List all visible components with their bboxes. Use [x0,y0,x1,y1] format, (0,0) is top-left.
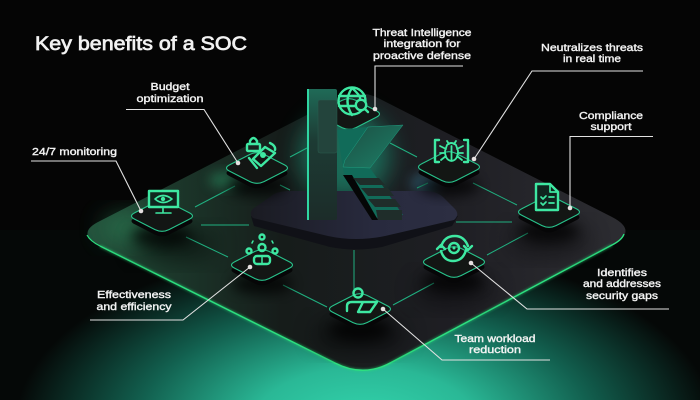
tile: neutralizes threats [418,140,480,196]
callout: team workload reduction: reduction [469,344,521,356]
callout: neutralizes threats [472,42,643,161]
callout: budget optimization: optimization [136,93,204,105]
callout: threat intelligence integration: proactive defense [373,50,471,62]
tile: compliance support [518,184,580,241]
callout: compliance support [568,110,653,210]
icon: bug in brackets [435,140,468,162]
callout: effectiveness and efficiency: and efficiency [96,301,172,313]
icon: person with laptop [347,288,377,312]
callout: threat intelligence integration [372,27,472,111]
callout: identifies security gaps: and addresses [583,278,661,290]
callout: team workload reduction: Team workload [454,333,536,345]
callout: identifies security gaps [469,261,669,309]
tile: effectiveness and efficiency [232,234,292,294]
icon: document with checklist [536,184,558,210]
icon: monitor with eye [149,191,178,213]
connector lines [186,143,528,307]
callout: threat intelligence integration: Threat Intelligence [372,27,472,39]
title: Key benefits of a SOC [35,34,247,55]
icon: people around a person [246,234,278,264]
callout: threat intelligence integration: integration for [384,38,461,50]
callout: neutralizes threats: Neutralizes threats [541,42,643,54]
callout: identifies security gaps: Identifies [597,267,647,279]
callout: 24/7 monitoring [31,146,143,213]
pedestal [251,191,458,250]
callout: team workload reduction [381,307,550,360]
icon: lock and money [247,138,275,168]
tile: budget optimization [226,138,288,196]
panel: isometric platform [87,93,626,370]
callout: budget optimization: Budget [150,81,190,93]
panel: threat intelligence tile [318,88,380,129]
K logo sculpture [307,89,403,220]
callout: compliance support: support [590,121,632,133]
callout: 24/7 monitoring: 24/7 monitoring [32,146,117,158]
tile: team workload reduction [330,288,390,339]
tile: 24/7 monitoring [132,191,192,246]
callout: compliance support: Compliance [579,110,643,122]
callout: effectiveness and efficiency [90,265,252,320]
callout: identifies security gaps: security gaps [586,290,658,302]
teal glow at the bottom [0,230,700,400]
icon: gear with cycle arrows [437,236,472,261]
callout: budget optimization [126,81,240,165]
callout: neutralizes threats: in real time [563,53,621,65]
icon: globe with magnifier [338,88,368,115]
tile: identifies security gaps [424,236,484,291]
callout: effectiveness and efficiency: Effectiveness [97,289,171,301]
